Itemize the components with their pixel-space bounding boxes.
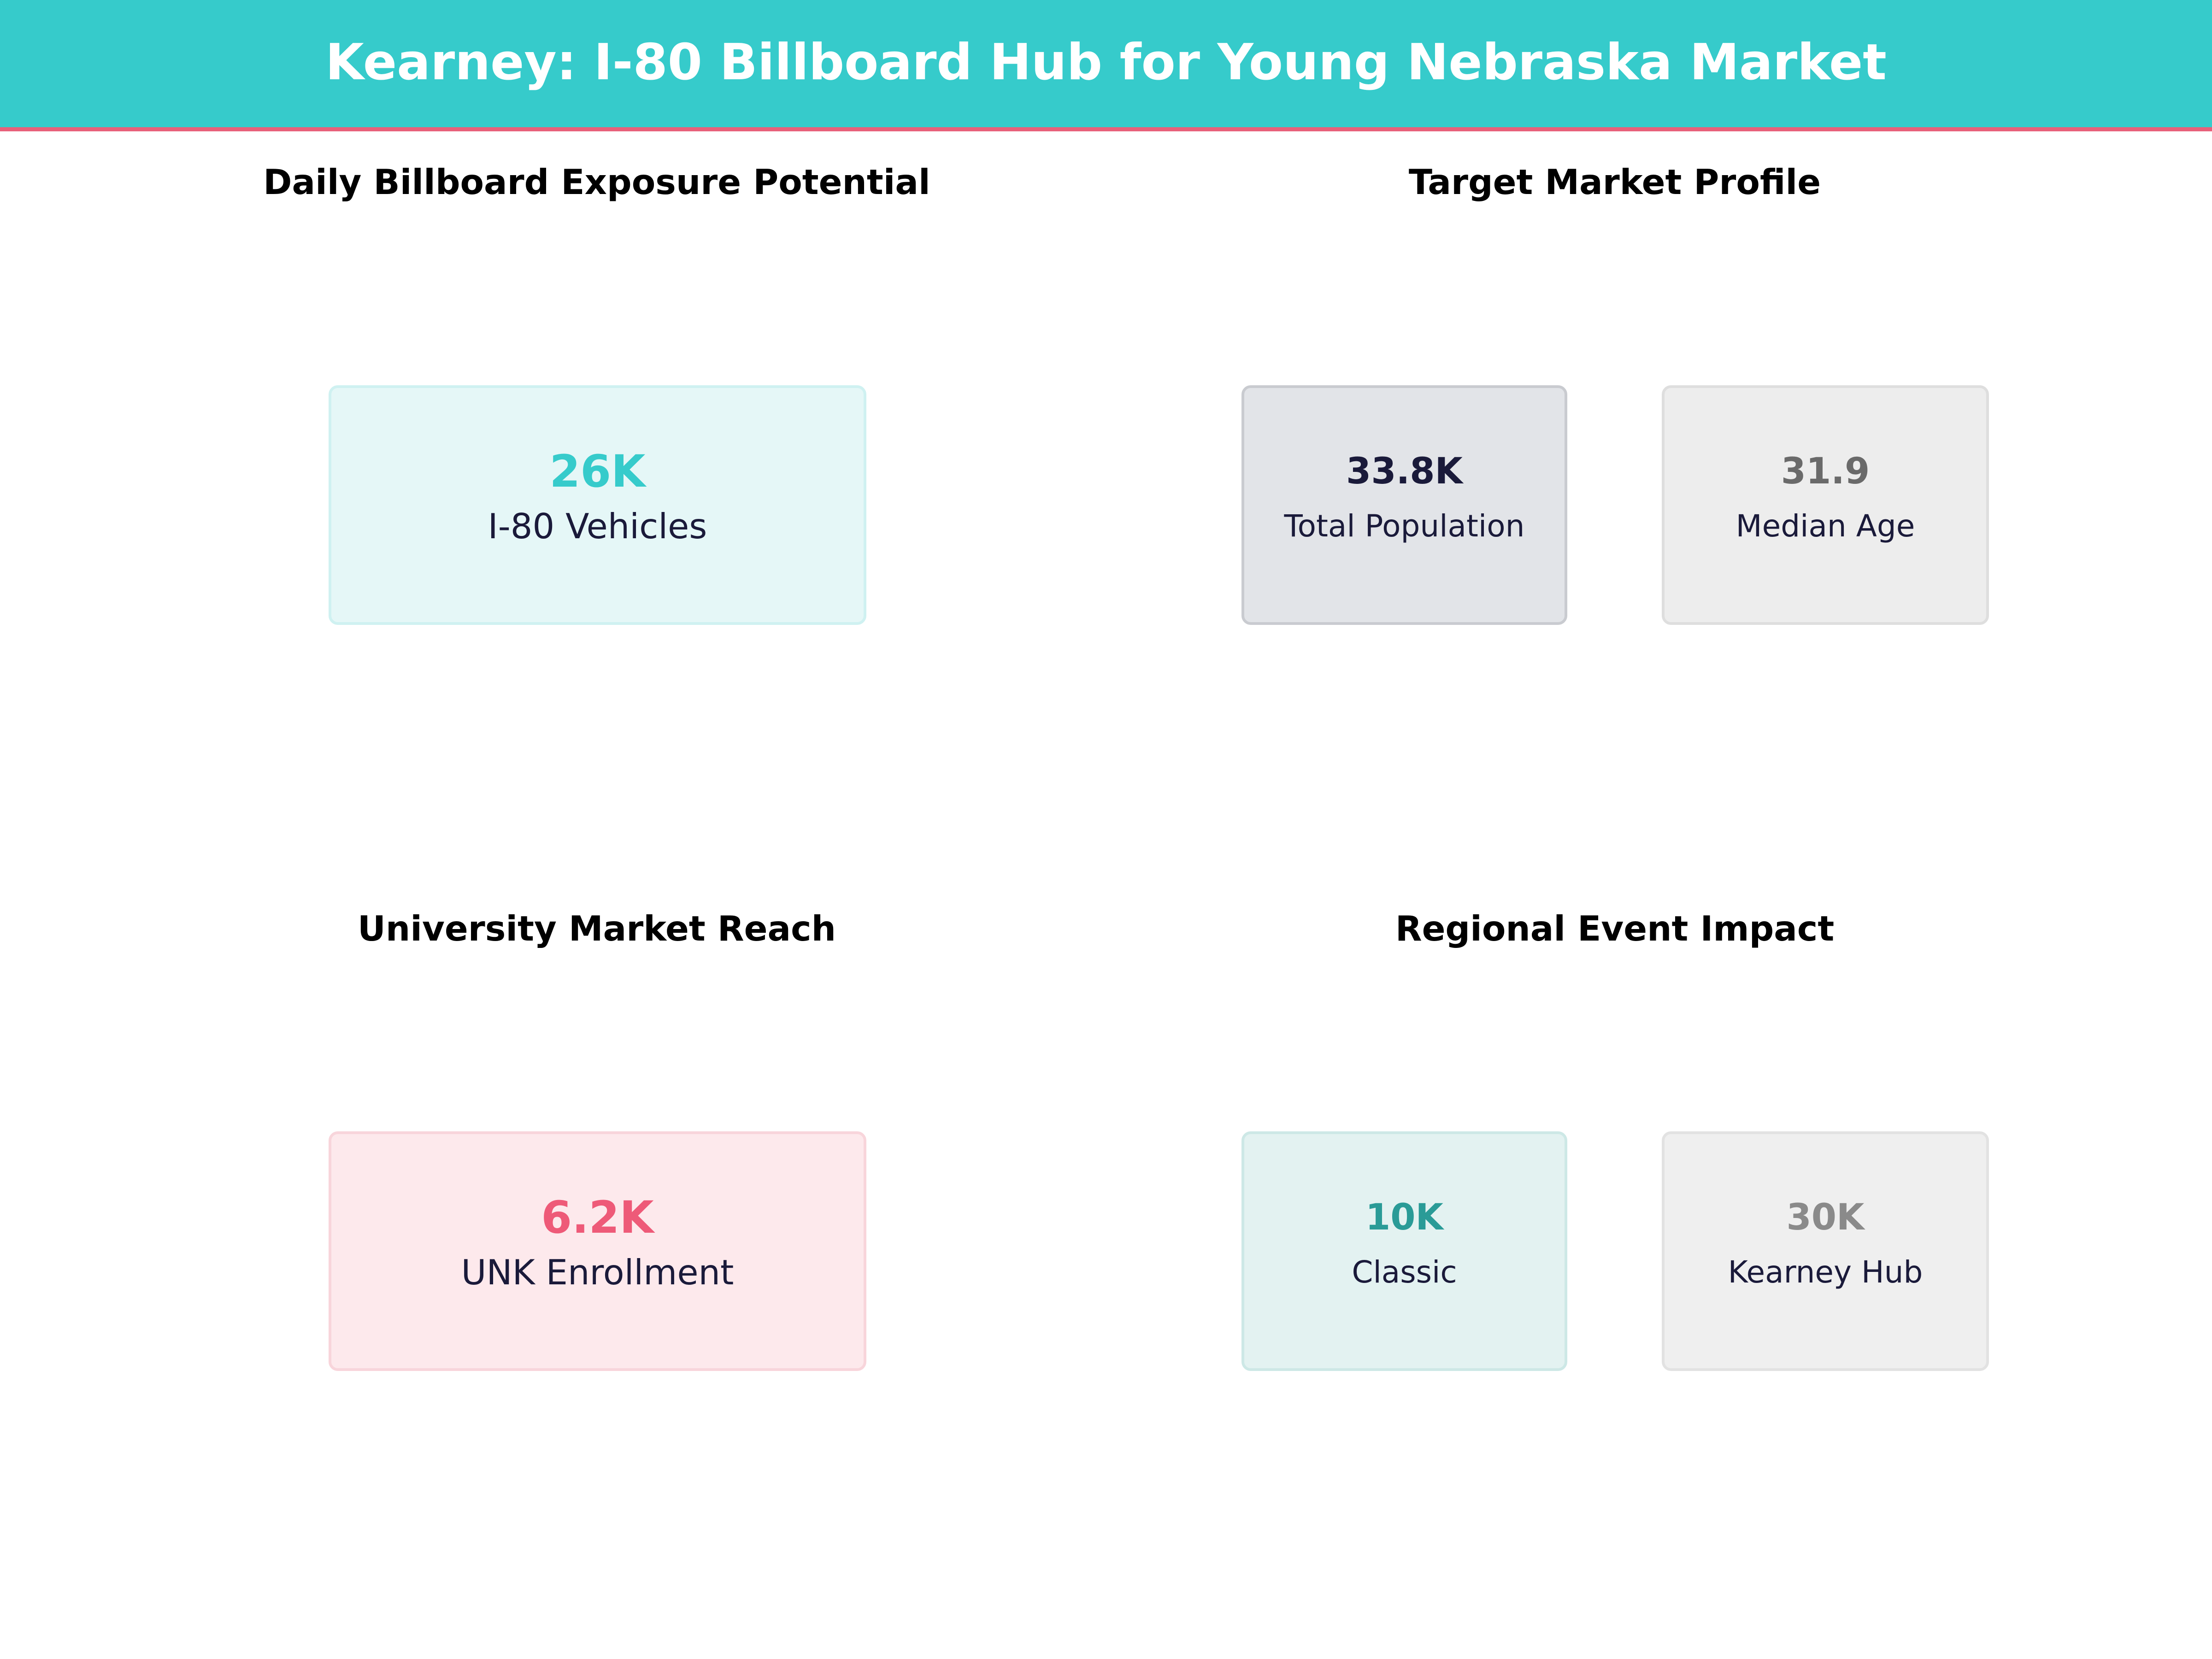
- card: I-80 vehicles: I-80 Vehicles: [488, 506, 707, 547]
- heading: exposure: Daily Billboard Exposure Potential: [263, 162, 930, 202]
- heading: university: University Market Reach: [358, 908, 836, 949]
- header bar: [0, 0, 2212, 131]
- card: median age: [1662, 385, 1989, 625]
- card: total population: [1241, 385, 1567, 625]
- card: total population: 33.8K: [1346, 451, 1463, 492]
- card: classic: [1241, 1131, 1567, 1371]
- card: UNK enrollment: 6.2K: [541, 1192, 654, 1243]
- heading: target market: Target Market Profile: [1409, 162, 1821, 202]
- heading: events: Regional Event Impact: [1395, 908, 1834, 949]
- card: classic: 10K: [1365, 1197, 1443, 1238]
- card: I-80 vehicles: 26K: [549, 446, 645, 497]
- card: median age: 31.9: [1781, 451, 1870, 492]
- card: UNK enrollment: [329, 1131, 866, 1371]
- card: classic: Classic: [1352, 1254, 1457, 1290]
- title: Kearney: I-80 Billboard Hub for Young Nebraska Market: [325, 33, 1887, 91]
- card: Kearney hub: 30K: [1786, 1197, 1865, 1238]
- card: Kearney hub: Kearney Hub: [1728, 1254, 1923, 1290]
- card: median age: Median Age: [1736, 508, 1915, 544]
- card: UNK enrollment: UNK Enrollment: [461, 1252, 734, 1293]
- card: total population: Total Population: [1284, 508, 1524, 544]
- card: I-80 vehicles: [329, 385, 866, 625]
- card: Kearney hub: [1662, 1131, 1989, 1371]
